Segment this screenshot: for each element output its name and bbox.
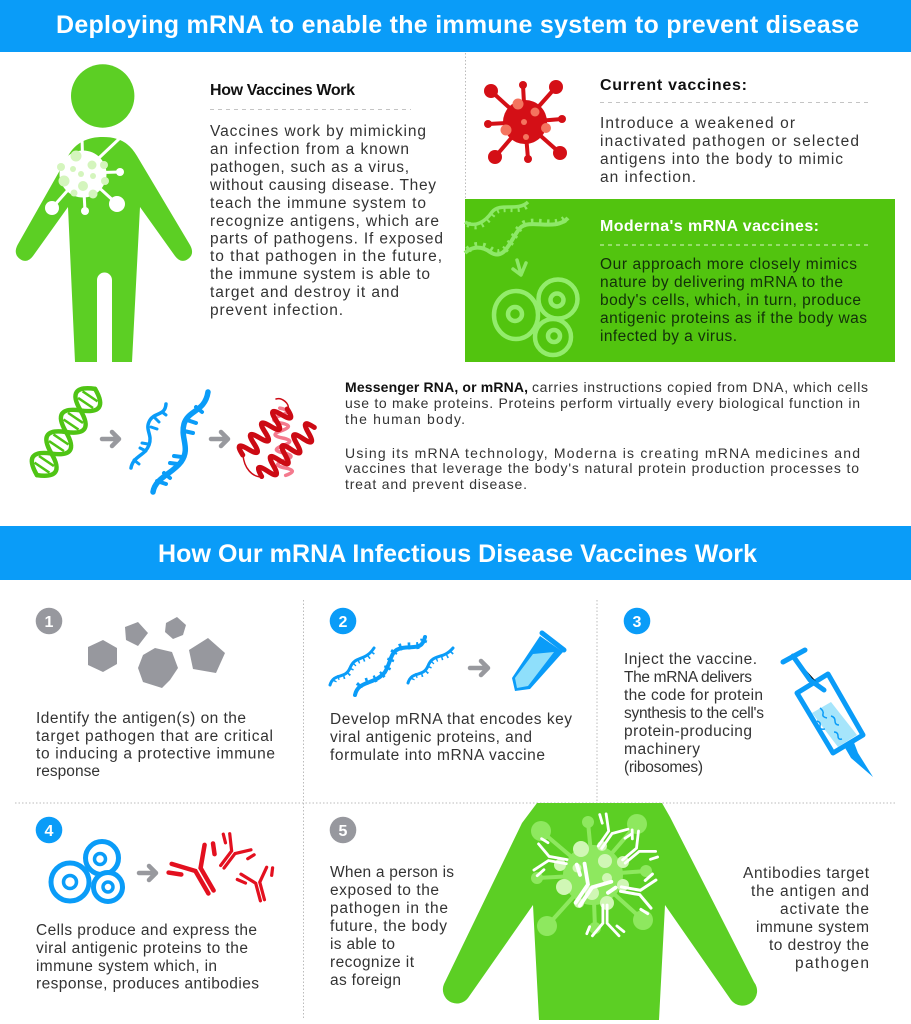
- panel: current vaccines: [484, 77, 871, 186]
- icon: test tube: [512, 633, 564, 691]
- heading: moderna's mrna vaccines: Moderna's mRNA vaccines:: [600, 218, 819, 235]
- section banner: [0, 526, 911, 580]
- text block: moderna approach: [600, 256, 867, 345]
- text: step 5 right: to destroy the: [769, 937, 869, 954]
- text block: how vaccines work: target and destroy it and: [210, 284, 399, 301]
- text block: how vaccines work: parts of pathogens. If exposed: [210, 230, 443, 248]
- text: step 4: immune system which, in: [36, 958, 217, 975]
- text: step 4: Cells produce and express the: [36, 922, 257, 939]
- number badge 2: [330, 608, 356, 634]
- number badge 2: 2: [339, 614, 348, 631]
- text block: moderna approach: antigenic proteins as if the body was: [600, 310, 867, 327]
- text: step 1: Identify the antigen(s) on the: [36, 710, 246, 727]
- text block: how vaccines work: without causing disease. They: [209, 177, 436, 194]
- text: step 5 left: future, the body: [330, 918, 447, 935]
- text block: messenger RNA: the human body.: [345, 411, 465, 427]
- text: step 3: machinery: [624, 741, 700, 758]
- arrow: [139, 866, 156, 880]
- icon: mRNA strands: [131, 392, 208, 492]
- text block: how vaccines work: prevent infection.: [210, 302, 343, 319]
- text: step 5 right: immune system: [756, 919, 869, 936]
- section banner: How Our mRNA Infectious Disease Vaccines Work: [158, 540, 757, 568]
- text: step 1: [36, 710, 275, 780]
- heading: current vaccines: Current vaccines:: [600, 77, 747, 94]
- step 3: [624, 608, 873, 777]
- text: step 5 right: activate the: [780, 901, 869, 918]
- number badge 5: 5: [339, 823, 348, 840]
- text: step 3: [624, 651, 764, 776]
- number badge 4: 4: [45, 823, 54, 840]
- text block: moderna approach: infected by a virus.: [600, 328, 737, 345]
- icon: protein: [237, 399, 320, 483]
- text: step 5 left: When a person is: [330, 864, 454, 881]
- text block: how vaccines work: the immune system is able to: [210, 266, 430, 283]
- text block: current vaccines: inactivated pathogen or selected: [600, 133, 859, 150]
- diagram: DNA to mRNA to protein: [26, 381, 320, 492]
- text: step 4: viral antigenic proteins to the: [36, 940, 248, 957]
- text: step 1: to inducing a protective immune: [36, 746, 275, 762]
- icon: antibodies: [166, 831, 280, 905]
- text block: messenger RNA: treat and prevent disease.: [345, 476, 527, 492]
- number badge 1: 1: [45, 614, 54, 631]
- text: step 5 left: [330, 864, 454, 989]
- text: step 4: response, produces antibodies: [36, 976, 259, 992]
- text block: messenger RNA: Messenger RNA, or mRNA,: [345, 379, 528, 395]
- text block: moderna approach: body's cells, which, in turn, produce: [600, 292, 861, 309]
- text: step 4: [36, 922, 259, 992]
- text: step 1: target pathogen that are critical: [36, 728, 273, 745]
- text: step 3: synthesis to the cell's: [624, 705, 764, 722]
- text block: messenger RNA: [345, 379, 868, 492]
- text block: how vaccines work: pathogen, such as a virus,: [210, 159, 409, 176]
- text: step 5 right: pathogen: [795, 955, 869, 972]
- text: step 2: viral antigenic proteins, and: [330, 729, 532, 746]
- text: step 2: Develop mRNA that encodes key: [330, 711, 572, 728]
- icon: DNA helix: [26, 381, 106, 483]
- icon: red virus: [484, 80, 567, 164]
- arrow: [102, 432, 119, 446]
- number badge 4: [36, 817, 62, 843]
- text block: current vaccines: an infection.: [600, 169, 696, 186]
- text: step 5 left: pathogen in the: [330, 900, 448, 917]
- text block: messenger RNA: carries instructions copied from DNA, which cells: [532, 379, 868, 395]
- icon: syringe: [783, 650, 873, 777]
- text: step 5 left: is able to: [330, 936, 395, 953]
- icon: antigens: [88, 617, 225, 688]
- text block: how vaccines work: Vaccines work by mimicking: [210, 123, 426, 140]
- title banner: [0, 0, 911, 52]
- step 4: [36, 817, 280, 992]
- text: step 3: The mRNA delivers: [624, 669, 752, 686]
- number badge 3: 3: [633, 614, 642, 631]
- icon: cells: [51, 842, 122, 902]
- text: step 3: Inject the vaccine.: [624, 651, 757, 668]
- text block: current vaccines: Introduce a weakened or: [600, 115, 795, 132]
- text block: current vaccines: [600, 115, 859, 186]
- arrow: [211, 432, 228, 446]
- text block: messenger RNA: Using its mRNA technology, Moderna is creating mRNA medicines and: [345, 445, 860, 461]
- text: step 3: the code for protein: [624, 687, 763, 704]
- text block: how vaccines work: an infection from a known: [210, 141, 409, 158]
- text: step 3: protein-producing: [624, 723, 752, 740]
- text block: how vaccines work: recognize antigens, which are: [210, 213, 439, 230]
- number badge 3: [624, 608, 650, 634]
- icon: person with virus: [16, 64, 192, 362]
- text: step 2: formulate into mRNA vaccine: [330, 747, 545, 764]
- text: step 2: [330, 711, 572, 764]
- panel: moderna mrna vaccines: [465, 199, 895, 362]
- text: step 5 left: recognize it: [330, 954, 415, 971]
- heading: how vaccines work: How Vaccines Work: [210, 82, 355, 99]
- text block: how vaccines work: to that pathogen in the future,: [210, 248, 442, 265]
- number badge 5: [330, 817, 356, 843]
- text: step 3: (ribosomes): [624, 759, 703, 776]
- text: step 5 right: the antigen and: [751, 883, 869, 900]
- icon: mRNA strands and cells: [465, 202, 578, 355]
- text block: how vaccines work: teach the immune system to: [210, 195, 426, 212]
- text: step 5 left: as foreign: [330, 972, 401, 989]
- icon: mRNA strands: [330, 637, 453, 695]
- text block: moderna approach: nature by delivering mRNA to the: [600, 274, 843, 291]
- text block: current vaccines: antigens into the body to mimic: [600, 151, 843, 168]
- text block: messenger RNA: vaccines that leverage the body's natural protein production processes to: [345, 460, 859, 476]
- text block: how vaccines work: [209, 123, 443, 319]
- text: step 1: response: [36, 763, 100, 780]
- icon: torso with virus and antibodies: [443, 803, 757, 1020]
- panel: how vaccines work: [16, 64, 443, 362]
- number badge 1: [36, 608, 62, 634]
- text: step 5 left: exposed to the: [330, 882, 439, 899]
- text: step 5 right: Antibodies target: [743, 865, 870, 882]
- step 2: [330, 608, 572, 764]
- step 1: [36, 608, 275, 780]
- step 5: [330, 803, 870, 1020]
- title banner: Deploying mRNA to enable the immune system to prevent disease: [56, 11, 859, 39]
- text: step 5 right: [743, 865, 870, 972]
- text block: moderna approach: Our approach more closely mimics: [600, 256, 857, 273]
- arrow: [470, 661, 488, 675]
- text block: messenger RNA: use to make proteins. Proteins perform virtually every biological function in: [345, 395, 860, 411]
